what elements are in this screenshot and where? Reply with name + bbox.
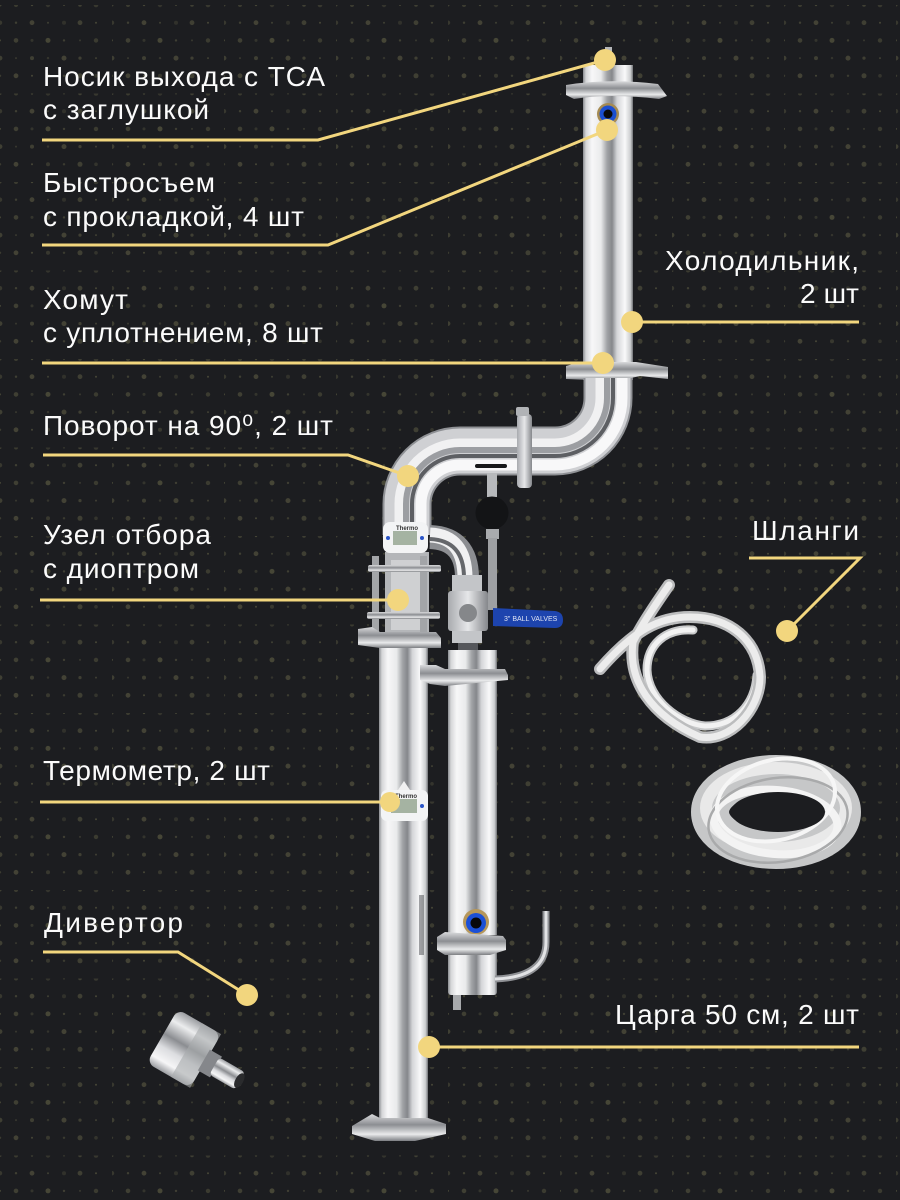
- fitting: [463, 909, 489, 935]
- bent outlet tube: [495, 911, 546, 979]
- thermometer: column: [381, 781, 428, 821]
- thermometer: column: Thermo: [395, 794, 417, 800]
- quick connector: [597, 103, 619, 125]
- callout: Быстросъем: Быстросъем: [43, 167, 215, 198]
- callout: Носик выхода с ТСА: Носик выхода с ТСА: [43, 61, 325, 92]
- sampling valve: knob and stem: [475, 464, 508, 610]
- callout: Хомут: Хомут: [43, 284, 128, 315]
- callout: Термометр: [40, 755, 400, 812]
- bent pipe to ball valve: [430, 535, 467, 578]
- lower side clamp: [437, 932, 506, 955]
- reflux column lower: [352, 645, 446, 1141]
- callout: Быстросъем: с прокладкой, 4 шт: [43, 201, 304, 232]
- callout: Холодильник: Холодильник,: [665, 245, 859, 276]
- flange clamp on the horizontal run: [517, 414, 532, 488]
- callout: Дивертор: Дивертор: [44, 907, 183, 938]
- ball valve: 3" BALL VALVES: [504, 616, 558, 623]
- callout: Поворот на 90: Поворот на 90⁰, 2 шт: [43, 410, 333, 441]
- callout: Холодильник: 2 шт: [800, 278, 859, 309]
- bottom clamp: [352, 1114, 446, 1141]
- callout: Хомут: [42, 284, 614, 374]
- elbow pipe assembly: [399, 378, 622, 535]
- callout: Дивертор: [43, 907, 258, 1006]
- callout: Поворот на 90: [43, 410, 419, 487]
- callout: Носик выхода с ТСА: с заглушкой: [43, 94, 209, 125]
- lower clamp: [566, 362, 668, 380]
- top clamp: [566, 81, 667, 99]
- thermometer: top: Thermo: [396, 526, 418, 532]
- thermometer: top: [383, 522, 428, 553]
- callout: Царга: [418, 999, 859, 1058]
- hose: coil: [703, 747, 853, 871]
- callout: Узел отбора: Узел отбора: [43, 519, 211, 550]
- callout: Холодильник: [621, 245, 859, 333]
- callout: Узел отбора: с диоптром: [43, 553, 199, 584]
- column: cooler tube: [566, 47, 668, 380]
- lower body: [448, 950, 497, 995]
- callout: Хомут: с уплотнением, 8 шт: [43, 317, 323, 348]
- callout: Узел отбора: [40, 519, 409, 611]
- diverter fitting: [147, 1009, 258, 1109]
- callout: Шланги: Шланги: [752, 515, 859, 546]
- ball valve: [448, 575, 563, 651]
- hose: single loop: [600, 585, 760, 738]
- callout: Носик выхода с ТСА: [42, 49, 616, 140]
- nozzle stub: [605, 47, 612, 67]
- blue handle: [493, 608, 563, 628]
- upper side clamp: [420, 665, 508, 686]
- callout: Термометр: Термометр, 2 шт: [43, 755, 270, 786]
- callout: Шланги: [749, 515, 860, 642]
- callout: Быстросъем: [42, 119, 618, 245]
- callout: Царга: Царга 50 см, 2 шт: [615, 999, 859, 1030]
- sight glass node: [358, 552, 441, 648]
- side column: [420, 650, 546, 1010]
